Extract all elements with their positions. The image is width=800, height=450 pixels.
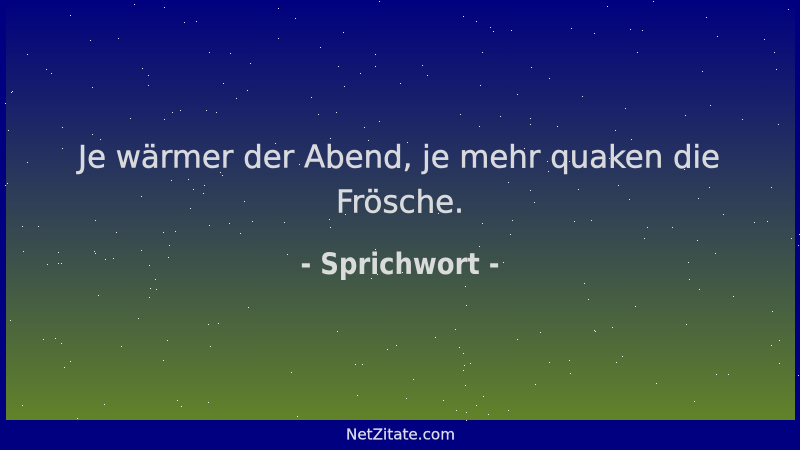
- attribution: - Sprichwort -: [300, 247, 500, 281]
- quote text: Frösche.: [336, 184, 464, 220]
- quote text: Je wärmer der Abend, je mehr quaken die: [76, 140, 720, 176]
- quote text: [76, 140, 720, 220]
- footer brand: NetZitate.com: [346, 426, 455, 444]
